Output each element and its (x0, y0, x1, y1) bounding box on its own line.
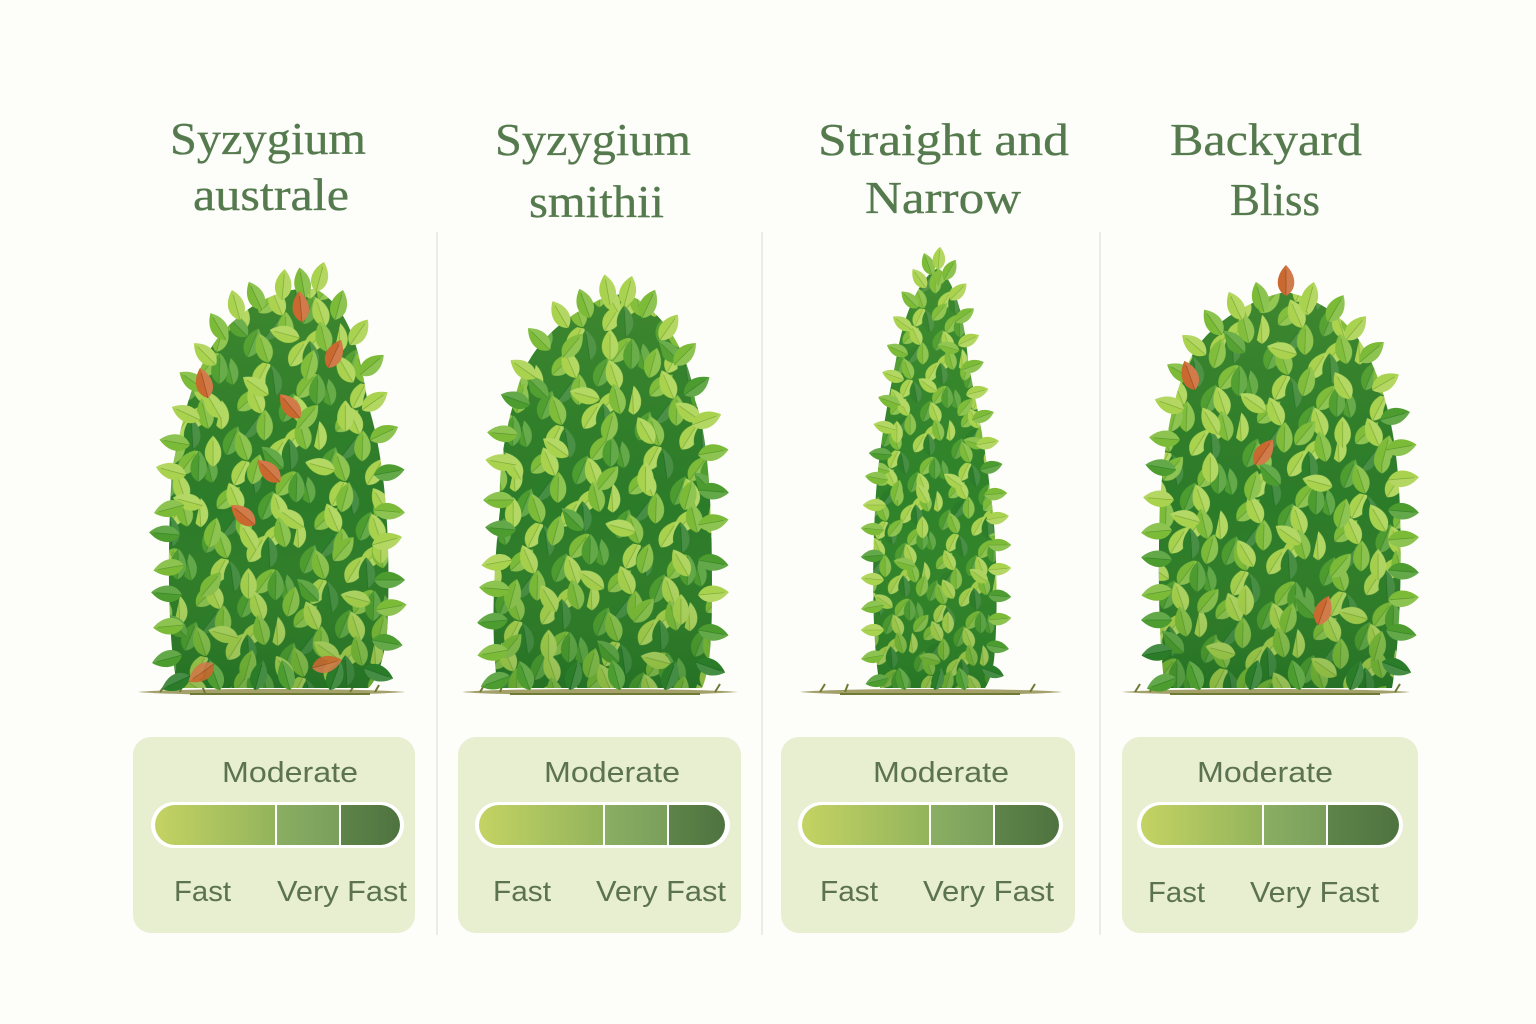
gradient bar (151, 802, 404, 848)
heading: Syzygium australe: Syzygium (170, 113, 366, 164)
heading: Backyard Bliss: Backyard (1170, 114, 1362, 165)
heading: Straight and Narrow: Straight and (818, 114, 1069, 165)
heading: Syzygium australe (170, 113, 366, 220)
growth rate panel (1122, 737, 1418, 933)
growth rate panel (133, 737, 415, 933)
growth rate panel: Very Fast (277, 876, 407, 908)
growth rate panel: Very Fast (923, 876, 1054, 908)
shrub illustration (148, 260, 408, 697)
growth rate panel: Fast (174, 876, 231, 908)
shrub illustration (476, 273, 730, 694)
growth rate panel (458, 737, 741, 933)
heading: Syzygium smithii: smithii (529, 176, 664, 227)
column: Syzygium smithii (458, 114, 741, 933)
growth rate panel: Moderate (544, 757, 680, 789)
gradient bar (798, 802, 1063, 848)
growth rate panel: Very Fast (1250, 877, 1379, 909)
heading: Straight and Narrow: Narrow (865, 172, 1022, 223)
growth rate panel: Moderate (873, 757, 1009, 789)
gradient bar (475, 802, 730, 848)
growth rate panel (781, 737, 1075, 933)
shrub illustration (1140, 265, 1420, 696)
ground strip (1122, 684, 1410, 695)
heading: Straight and Narrow (818, 114, 1069, 223)
growth rate panel: Fast (1148, 877, 1205, 909)
heading: Backyard Bliss: Bliss (1230, 174, 1320, 225)
growth rate panel: Very Fast (596, 876, 726, 908)
growth rate panel: Fast (493, 876, 551, 908)
shrub illustration (860, 246, 1012, 692)
gradient bar (1137, 802, 1403, 848)
ground strip (462, 684, 738, 695)
growth rate panel: Fast (820, 876, 878, 908)
growth rate panel: Moderate (222, 757, 358, 789)
ground strip (138, 683, 405, 695)
ground strip (800, 684, 1062, 695)
column: Syzygium australe (133, 113, 415, 933)
heading: Syzygium smithii (495, 114, 691, 227)
column: Backyard Bliss (1122, 114, 1420, 933)
heading: Syzygium australe: australe (193, 169, 349, 220)
growth rate panel: Moderate (1197, 757, 1333, 789)
heading: Syzygium smithii: Syzygium (495, 114, 691, 165)
column: Straight and Narrow (781, 114, 1075, 933)
heading: Backyard Bliss (1170, 114, 1362, 225)
